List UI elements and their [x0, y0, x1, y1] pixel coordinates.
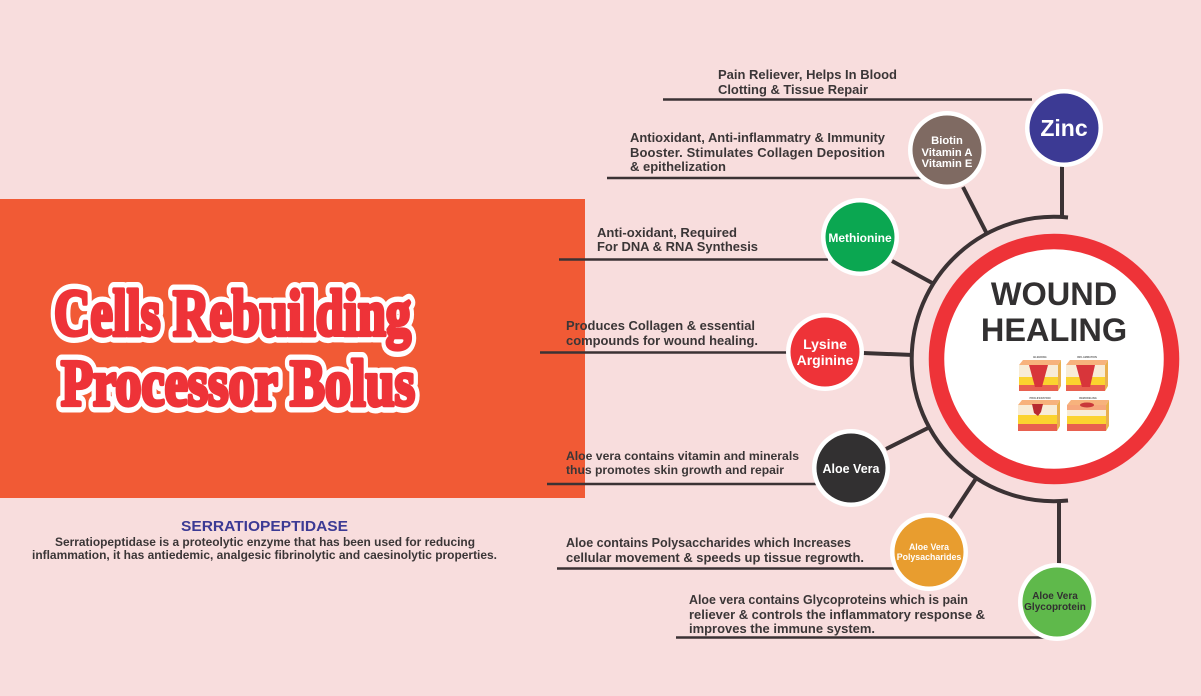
hub heading: WOUND — [991, 276, 1117, 312]
text block: serratiopeptidase — [32, 518, 497, 562]
icon: four wound healing stages: BLEEDING — [1033, 355, 1047, 359]
text: zinc description — [718, 67, 897, 97]
node: aloe vera glycoprotein: Glycoprotein — [1024, 602, 1086, 613]
text: glycoprotein description: improves the immune system. — [689, 621, 875, 636]
node: zinc — [1025, 89, 1103, 167]
node: aloe vera — [812, 429, 890, 507]
node: aloe vera glycoprotein — [1018, 563, 1096, 641]
stage: proliferation — [1018, 400, 1060, 431]
stage: bleeding — [1019, 360, 1061, 391]
node: biotin vitamins: Vitamin E — [922, 158, 973, 170]
text block: serratiopeptidase: Serratiopeptidase is a proteolytic enzyme that has been used for reducing — [55, 535, 475, 549]
hub heading: HEALING — [981, 312, 1127, 348]
text: polysaccharides description: cellular movement & speeds up tissue regrowth. — [566, 550, 864, 565]
node: methionine — [821, 198, 899, 276]
text: aloe vera description: Aloe vera contains vitamin and minerals — [566, 449, 799, 463]
text: aloe vera description — [566, 449, 799, 477]
outer arc connector — [912, 217, 1068, 501]
node: aloe vera polysacharides: Aloe Vera — [909, 542, 949, 552]
node: lysine arginine — [786, 313, 864, 391]
text: biotin description: Antioxidant, Anti-inflammatry & Immunity — [630, 130, 886, 145]
text block: serratiopeptidase: SERRATIOPEPTIDASE — [181, 518, 348, 535]
text: polysaccharides description — [566, 535, 864, 565]
text: polysaccharides description: Aloe contains Polysaccharides which Increases — [566, 535, 851, 550]
text: biotin description — [630, 130, 886, 174]
panel: orange title banner — [0, 199, 585, 498]
icon: four wound healing stages: PROLIFERATION — [1030, 396, 1051, 400]
text: methionine description — [597, 225, 758, 254]
node: aloe vera: Aloe Vera — [823, 462, 881, 476]
node: aloe vera glycoprotein: Aloe Vera — [1032, 591, 1078, 602]
text: glycoprotein description — [689, 592, 985, 636]
text: glycoprotein description: Aloe vera contains Glycoproteins which is pain — [689, 592, 968, 607]
node: biotin vitamins: Biotin — [931, 135, 963, 147]
text: glycoprotein description: reliever & controls the inflammatory response & — [689, 607, 985, 622]
text block: serratiopeptidase: inflammation, it has antiedemic, analgesic fibrinolytic and caesinolytic properties. — [32, 548, 497, 562]
node: lysine arginine: Lysine — [803, 336, 847, 352]
node: zinc: Zinc — [1040, 115, 1088, 141]
icon: four wound healing stages: REMODELING — [1079, 396, 1097, 400]
node: lysine arginine: Arginine — [797, 352, 854, 368]
node: aloe vera polysacharides — [890, 513, 968, 591]
stage: remodeling — [1067, 400, 1109, 431]
central hub: wound healing — [936, 242, 1172, 476]
node: biotin vitamins — [908, 111, 986, 189]
text: methionine description: Anti-oxidant, Required — [597, 225, 737, 240]
title: Cells Rebuilding — [54, 277, 411, 350]
text: biotin description: & epithelization — [630, 159, 726, 174]
title: Cells Rebuilding — [54, 277, 411, 350]
stage: inflammation — [1066, 360, 1108, 391]
icon: four wound healing stages — [1018, 355, 1109, 431]
text: zinc description: Clotting & Tissue Repair — [718, 82, 868, 97]
text: aloe vera description: thus promotes skin growth and repair — [566, 463, 784, 477]
leader lines — [540, 100, 1045, 638]
text: lysine description: compounds for wound healing. — [566, 333, 758, 348]
title: Processor Bolus — [61, 347, 415, 420]
node: biotin vitamins: Vitamin A — [922, 147, 972, 159]
node: methionine: Methionine — [828, 231, 892, 245]
text: zinc description: Pain Reliever, Helps In Blood — [718, 67, 897, 82]
node: aloe vera polysacharides: Polysacharides — [897, 552, 961, 562]
connector lines — [863, 165, 1062, 564]
title — [54, 277, 415, 420]
text: biotin description: Booster. Stimulates Collagen Deposition — [630, 145, 885, 160]
text: lysine description: Produces Collagen & essential — [566, 318, 755, 333]
text: lysine description — [566, 318, 758, 348]
text: methionine description: For DNA & RNA Synthesis — [597, 239, 758, 254]
title: Processor Bolus — [61, 347, 415, 420]
icon: four wound healing stages: INFLAMMATION — [1077, 355, 1097, 359]
